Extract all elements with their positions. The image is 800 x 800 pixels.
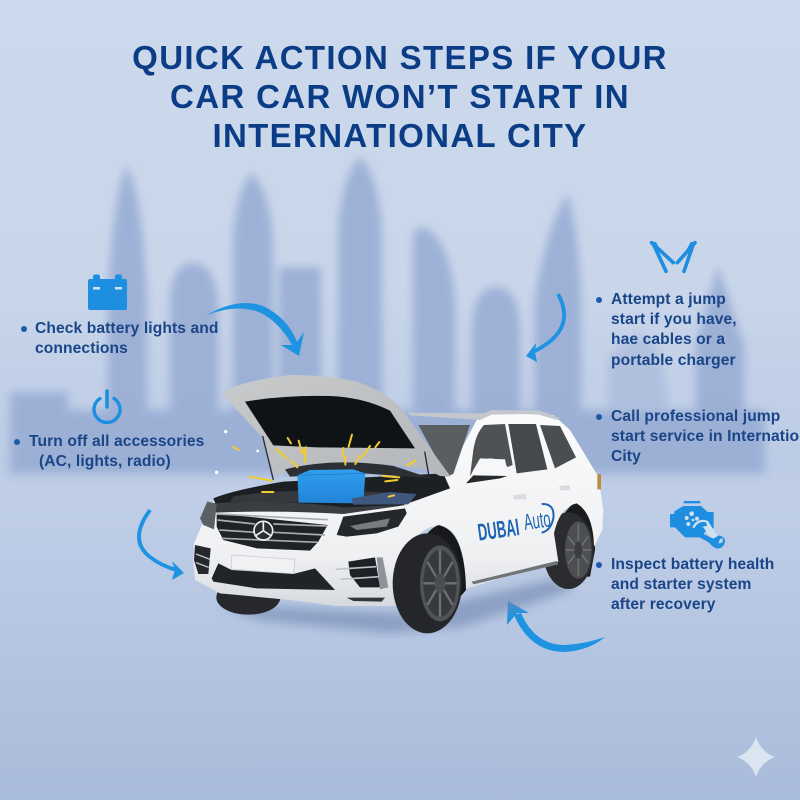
step: inspect battery (596, 556, 774, 613)
door handles and sill (513, 494, 526, 499)
step: check battery: connections (35, 340, 128, 357)
car with open hood (193, 375, 604, 637)
icon: jumper clamps (650, 240, 697, 274)
wheels (216, 580, 280, 615)
logo: Dubai Auto: DUBAI (476, 514, 521, 547)
arrow: to wheel from right (507, 601, 605, 652)
step: call professional: City (611, 448, 641, 465)
front wheel arch (408, 525, 466, 605)
step: attempt jump start: Attempt a jump (611, 291, 726, 308)
title: QUICK ACTION STEPS IF YOUR (132, 39, 668, 76)
step: attempt jump start: hae cables or a (611, 331, 725, 348)
title: CAR CAR WON’T START IN (170, 78, 630, 115)
step: call professional (596, 408, 800, 465)
lower intake (212, 563, 335, 590)
mirror (475, 458, 508, 475)
step: inspect battery: and starter system (611, 576, 751, 593)
logo: Dubai Auto: Auto (522, 505, 552, 535)
roof rail (408, 410, 561, 420)
step: turn off accessories: (AC, lights, radio) (39, 453, 171, 470)
icon: engine with wrench (670, 501, 726, 549)
front hood lip (210, 502, 407, 514)
icon: power (92, 389, 122, 424)
arrow: to engine from right (526, 293, 566, 362)
title (132, 39, 668, 154)
title: INTERNATIONAL CITY (212, 117, 588, 154)
front wheel (393, 533, 462, 633)
step: check battery (21, 320, 219, 357)
step: attempt jump start: portable charger (611, 352, 736, 369)
arrow: to bumper from left (137, 509, 184, 580)
headlights (200, 501, 217, 529)
step: turn off accessories (14, 433, 204, 470)
faint tower (608, 335, 668, 410)
arrow: to hood from left (207, 303, 304, 356)
side windows (470, 424, 513, 477)
white glints (215, 430, 259, 474)
hood struts (263, 436, 429, 480)
windshield (418, 425, 470, 477)
sparks (233, 435, 415, 497)
fog lamp (348, 557, 380, 587)
battery (297, 469, 417, 505)
step: turn off accessories: Turn off all accessories (29, 433, 204, 450)
step: inspect battery: after recovery (611, 596, 716, 613)
step: check battery: Check battery lights and (35, 320, 219, 337)
step: inspect battery: Inspect battery health (611, 556, 774, 573)
icon: battery (88, 274, 127, 310)
step: attempt jump start: start if you have, (611, 311, 737, 328)
hood underside (222, 375, 451, 477)
grille (217, 513, 328, 551)
ground shadow (217, 578, 573, 633)
engine bay (213, 473, 450, 513)
step: attempt jump start (596, 291, 737, 369)
vehicle body (193, 413, 603, 606)
step: call professional: Call professional jump (611, 408, 780, 425)
license plate (232, 555, 295, 574)
logo: star (254, 521, 273, 540)
icon: sparkle (737, 738, 774, 777)
